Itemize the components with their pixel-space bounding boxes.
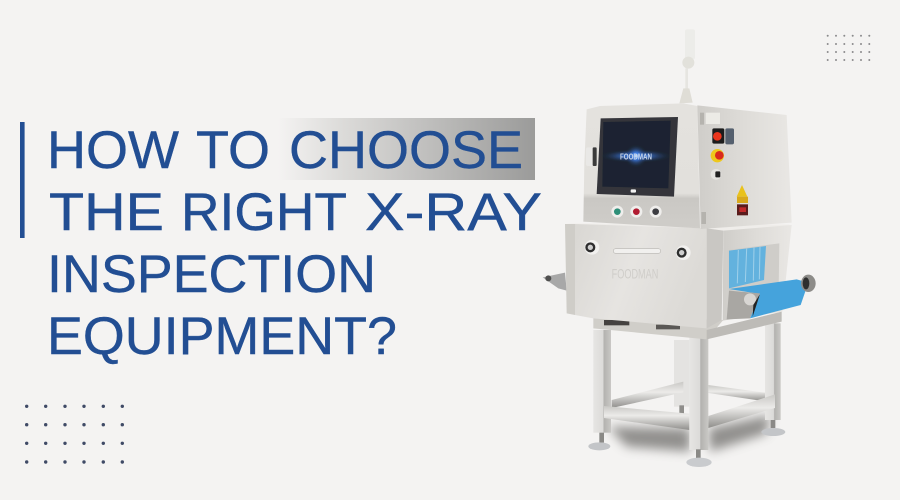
- title: CHOOSE: [289, 121, 523, 180]
- hinges: [700, 113, 706, 224]
- conveyor belt: [729, 279, 808, 318]
- title: EQUIPMENT?: [47, 307, 397, 366]
- title: HOW: [47, 121, 179, 180]
- dot grid: top right: [827, 35, 870, 61]
- warning label: [737, 185, 748, 215]
- lower cabinet with conveyor: [543, 223, 816, 339]
- floor shadow: [608, 415, 770, 452]
- door latch: [586, 147, 597, 166]
- tunnel opening: [728, 243, 779, 291]
- control knobs: [585, 240, 599, 255]
- signal tower: [679, 29, 695, 103]
- stand and legs: [588, 323, 785, 467]
- brand mark: FOODMAN: [612, 266, 658, 282]
- title highlight gradient: [278, 118, 535, 180]
- title: TO: [196, 121, 270, 180]
- dot grid: bottom left: [25, 405, 124, 464]
- blue curtain: [729, 246, 766, 288]
- side controls: [706, 113, 734, 180]
- left conveyor end: [543, 273, 567, 291]
- upper cabinet: [583, 29, 792, 229]
- title: INSPECTION: [47, 245, 376, 304]
- touch screen: FOODMAN: [620, 152, 652, 161]
- handle: [613, 249, 661, 253]
- title: RIGHT: [181, 183, 347, 242]
- title: [47, 121, 542, 366]
- title: THE: [49, 183, 164, 242]
- title: X-RAY: [365, 183, 542, 242]
- accent bar: [20, 122, 25, 238]
- panel buttons: [611, 206, 662, 218]
- touch screen: [597, 117, 678, 197]
- x-ray inspection machine: [543, 29, 816, 467]
